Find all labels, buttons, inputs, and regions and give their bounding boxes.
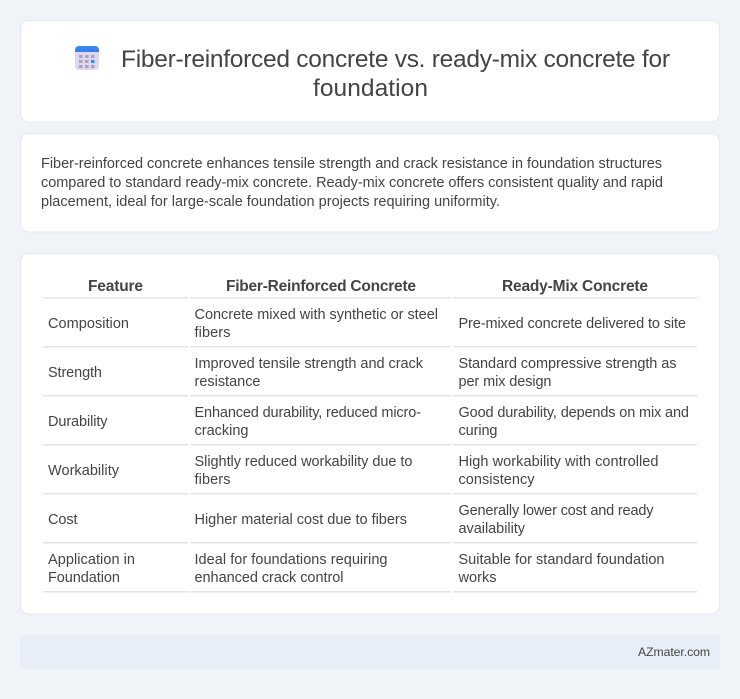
row: application in foundation: enhanced crack control	[194, 570, 344, 586]
summary text	[41, 156, 663, 210]
row: cost: availability	[458, 521, 526, 537]
footer bar: AZmater.com	[638, 645, 710, 659]
row: cost: Generally lower cost and ready	[458, 503, 654, 519]
panel: comparison table	[20, 254, 720, 614]
icon: calendar	[75, 46, 99, 70]
table header row: Feature	[88, 278, 143, 295]
row: composition: Concrete mixed with synthetic or steel	[194, 307, 438, 323]
row: application in foundation: works	[458, 570, 496, 586]
row: composition: fibers	[194, 325, 230, 341]
summary text: compared to standard ready-mix concrete. Ready-mix concrete offers consistent quality and rapid	[41, 175, 663, 191]
row: workability: consistency	[458, 472, 535, 488]
row: strength: Improved tensile strength and crack	[194, 356, 424, 372]
row: cost	[48, 503, 654, 537]
row: application in foundation: Ideal for foundations requiring	[194, 552, 388, 568]
row: strength: Strength	[48, 365, 102, 381]
row: application in foundation	[48, 552, 664, 586]
title: foundation	[313, 75, 428, 102]
row: strength: per mix design	[458, 374, 552, 390]
row: application in foundation: Foundation	[48, 570, 120, 586]
table header row: Fiber-Reinforced Concrete	[226, 278, 416, 295]
title	[121, 46, 670, 102]
title: Fiber-reinforced concrete vs. ready-mix concrete for	[121, 46, 670, 73]
footer bar	[20, 635, 720, 669]
row: cost: Higher material cost due to fibers	[194, 512, 407, 528]
row: workability: Workability	[48, 463, 120, 479]
panel: summary	[20, 134, 720, 232]
summary text: Fiber-reinforced concrete enhances tensile strength and crack resistance in foundation structures	[41, 156, 662, 172]
row: application in foundation: Application in	[48, 552, 135, 568]
table header row	[88, 278, 648, 295]
row: composition: Composition	[48, 316, 129, 332]
row: workability: Slightly reduced workability due to	[194, 454, 412, 470]
summary text: placement, ideal for large-scale foundation projects requiring uniformity.	[41, 194, 500, 210]
row: strength	[48, 356, 676, 390]
panel: title header	[20, 20, 720, 122]
row: workability: High workability with controlled	[458, 454, 658, 470]
row: durability	[48, 405, 689, 439]
row: durability: curing	[458, 423, 498, 439]
table header row: Ready-Mix Concrete	[502, 278, 648, 295]
row: durability: Good durability, depends on mix and	[458, 405, 689, 421]
row: strength: Standard compressive strength as	[458, 356, 676, 372]
row: composition	[48, 307, 686, 341]
row: durability: cracking	[194, 423, 248, 439]
row: durability: Durability	[48, 414, 108, 430]
row: workability: fibers	[194, 472, 230, 488]
row: composition: Pre-mixed concrete delivered to site	[458, 316, 686, 332]
row: application in foundation: Suitable for standard foundation	[458, 552, 664, 568]
row: durability: Enhanced durability, reduced micro-	[194, 405, 421, 421]
row: strength: resistance	[194, 374, 260, 390]
row: workability	[48, 454, 658, 488]
row: cost: Cost	[48, 512, 78, 528]
